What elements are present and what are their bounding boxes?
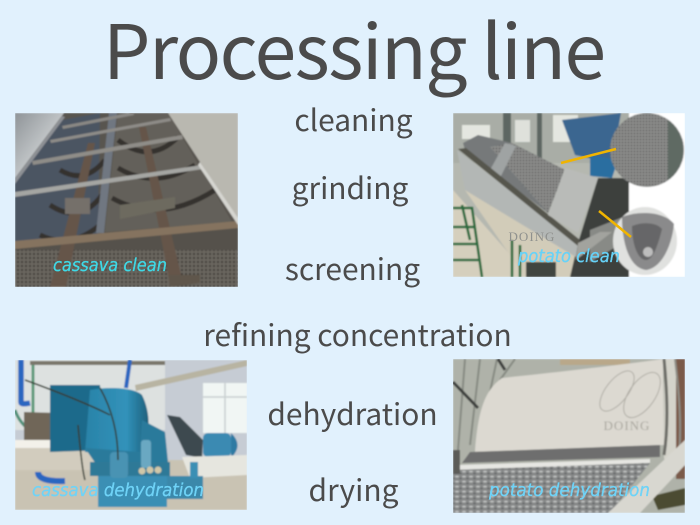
panel: potato dehydration photo: DOING — [604, 418, 650, 433]
step: dehydration: dehydration — [267, 390, 438, 434]
panel: cassava clean photo — [15, 112, 238, 287]
step: refining concentration: refining concentration — [203, 311, 512, 355]
step: grinding: grinding — [292, 164, 409, 208]
inset mesh drum — [629, 113, 685, 190]
caption: cassava dehydration: cassava dehydration — [32, 480, 204, 501]
caption: potato dehydration: potato dehydration — [488, 480, 650, 501]
watermark — [599, 370, 662, 418]
orange pointer lines — [561, 149, 631, 237]
step: screening: screening — [285, 245, 420, 289]
stairs — [453, 205, 520, 277]
panel: potato clean photo — [453, 113, 685, 277]
step: drying: drying — [309, 466, 399, 510]
caption: cassava clean: cassava clean — [53, 255, 167, 276]
panel: cassava dehydration photo — [15, 360, 247, 510]
panel: potato dehydration photo — [453, 359, 685, 513]
inset bowl — [613, 207, 677, 275]
watermark: DOING — [509, 229, 555, 244]
step: cleaning: cleaning — [294, 96, 413, 140]
caption: potato clean: potato clean — [517, 246, 620, 267]
